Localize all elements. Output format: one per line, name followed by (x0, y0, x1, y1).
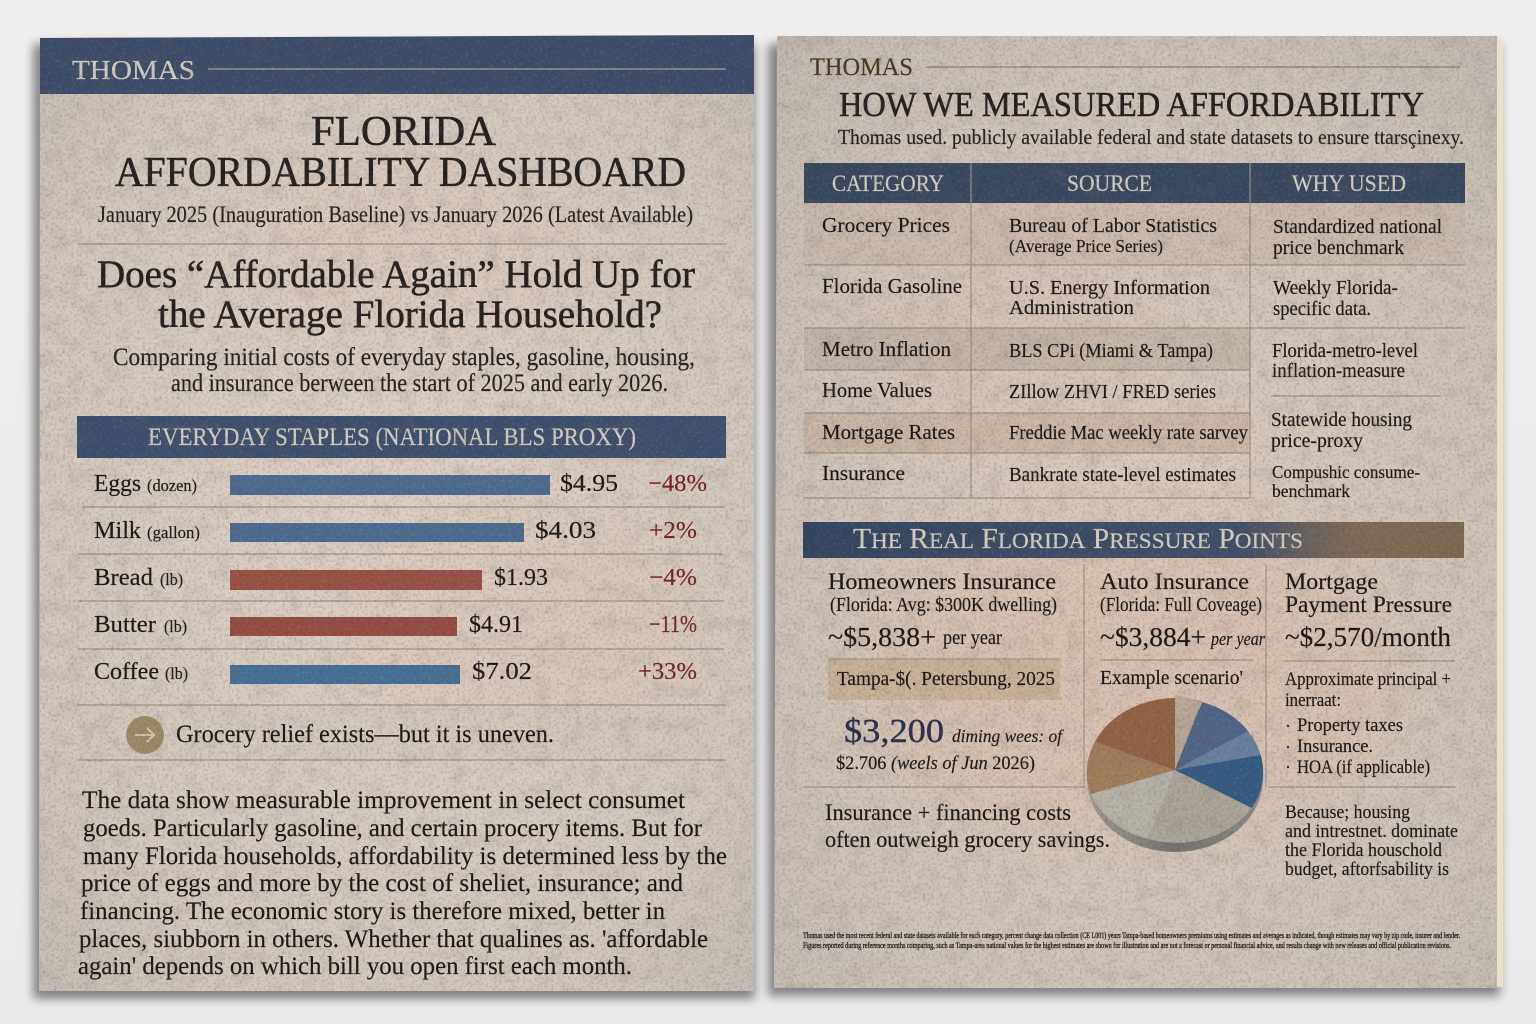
table: sources (804, 163, 1465, 501)
column: auto insurance: ~$3,884+ (1100, 622, 1206, 652)
highlight box: Tampa (828, 660, 1060, 700)
table column: why used: price benchmark (1273, 237, 1404, 259)
callout background (77, 705, 726, 760)
staples panel banner (77, 416, 726, 458)
row: bread (94, 565, 697, 591)
list: mortgage components (1287, 716, 1430, 778)
column: homeowners insurance: (Florida: Avg: $300K dwelling) (830, 595, 1057, 616)
body paragraph: goeds. Particularly gasoline, and certain procery items. But for (83, 813, 702, 842)
takeaway: insurance and financing: Insurance + financing costs (825, 800, 1071, 825)
column: mortgage payment pressure: inerraat: (1285, 691, 1341, 711)
row: bread: Bread (94, 565, 153, 591)
takeaway: insurance and financing (825, 800, 1110, 852)
table column: why used: Statewide housing (1271, 409, 1412, 431)
icon: arrow in circle (126, 716, 164, 754)
row: milk: +2% (649, 518, 697, 544)
row: milk: Milk (94, 518, 141, 544)
column: homeowners insurance: ~$5,838+ (828, 622, 936, 652)
table column: category: Home Values (822, 378, 932, 402)
intro text: datasets: Thomas used. publicly available federal and state datasets to ensure ttarsçinexy. (838, 125, 1464, 149)
highlight box: Tampa: Tampa-$(. Petersbung, 2025 (837, 668, 1055, 690)
table column: why used (1271, 216, 1442, 501)
table column: category: Metro Inflation (822, 337, 951, 361)
row: eggs (94, 471, 707, 497)
title: FLORIDA (311, 109, 497, 155)
body paragraph: financing. The economic story is therefore mixed, better in (80, 896, 665, 925)
row: coffee: $7.02 (472, 659, 532, 685)
list: mortgage components: Property taxes (1297, 716, 1403, 736)
row: butter: −11% (649, 612, 697, 638)
row: coffee (94, 659, 697, 685)
table column: why used: price-proxy (1271, 430, 1363, 452)
column: auto insurance: per year (1209, 629, 1266, 650)
intro text (113, 344, 695, 397)
row: butter (94, 612, 697, 638)
column: mortgage payment pressure: ~$2,570/month (1285, 622, 1451, 652)
staples panel banner: EVERYDAY STAPLES (NATIONAL BLS PROXY) (148, 424, 636, 451)
subtitle: date range: January 2025 (Inauguration Baseline) vs January 2026 (Latest Available) (98, 202, 693, 227)
pressure points banner (803, 522, 1464, 558)
intro text: Comparing initial costs of everyday staples, gasoline, housing, (113, 344, 695, 371)
heading: question: Does “Affordable Again” Hold Up for (97, 253, 695, 296)
column: auto insurance: (Florida: Full Coveage) (1100, 595, 1262, 616)
body paragraph: The data show measurable improvement in select consumet (82, 785, 685, 814)
body paragraph: many Florida households, affordability is determined less by the (83, 841, 727, 870)
pressure points banner: THE REAL FLORIDA PRESSURE POINTS (853, 524, 1303, 555)
table column: source: ZIllow ZHVI / FRED series (1009, 381, 1216, 403)
body paragraph: places, siubborn in others. Whether that qualines as. 'affordable (79, 924, 708, 953)
note: housing dominates: budget, aftorfsability is (1285, 860, 1449, 880)
row: butter: $4.91 (469, 612, 523, 638)
column: mortgage payment pressure: Payment Pressure (1285, 592, 1452, 618)
panel: everyday staples (77, 416, 726, 760)
title (115, 109, 686, 196)
body paragraph: price of eggs and more by the cost of sheliet, insurance; and (81, 868, 683, 897)
column: mortgage payment pressure (1285, 569, 1452, 778)
table column: source (1009, 215, 1249, 486)
table column: category: Grocery Prices (822, 213, 950, 237)
row: milk (94, 518, 697, 544)
page edge: cream paper stack (1495, 40, 1503, 987)
row: coffee: +33% (638, 659, 697, 685)
table column: why used: Compushic consume- (1272, 462, 1420, 482)
row: milk: (gallon) (147, 523, 200, 542)
column: homeowners insurance (828, 569, 1065, 774)
row: bread: $1.93 (494, 565, 548, 591)
note: housing dominates (1285, 803, 1458, 880)
row: eggs: Eggs (94, 471, 141, 497)
heading: question (97, 253, 695, 336)
list: mortgage components: HOA (if applicable) (1297, 758, 1430, 778)
row: coffee: Coffee (94, 659, 159, 685)
table column: category: Florida Gasoline (822, 274, 962, 298)
chart: pie (1087, 695, 1263, 852)
column: homeowners insurance: diming wees: of (952, 726, 1065, 746)
table header: WHY USED (1292, 171, 1406, 196)
panel: left page (39, 35, 754, 991)
row: bread: (lb) (160, 570, 183, 589)
column: mortgage payment pressure: Approximate principal + (1285, 670, 1451, 690)
panel: right page (774, 36, 1497, 988)
body paragraph: again' depends on which bill you open first each month. (78, 951, 632, 980)
table column: why used: Standardized national (1273, 216, 1442, 238)
body paragraph (78, 785, 727, 980)
heading: how we measured: HOW WE MEASURED AFFORDABILITY (839, 85, 1424, 124)
takeaway: insurance and financing: often outweigh grocery savings. (825, 827, 1110, 852)
table column: source: Bankrate state-level estimates (1009, 464, 1236, 486)
table column: source: BLS CPi (Miami & Tampa) (1009, 340, 1213, 362)
table header (804, 163, 1465, 203)
table header: CATEGORY (832, 171, 944, 196)
column: homeowners insurance: $2.706 (weels of Jun 2026) (836, 753, 1035, 774)
masthead: Thomas: THOMAS (810, 54, 913, 81)
column: homeowners insurance: Homeowners Insurance (828, 569, 1056, 595)
table column: category (822, 213, 962, 485)
table column: source: (Average Price Series) (1009, 236, 1163, 257)
row: bread: −4% (649, 565, 697, 591)
footer fine print (790, 921, 1485, 950)
table column: why used: inflation-measure (1272, 360, 1405, 382)
callout: grocery relief: Grocery relief exists—but it is uneven. (176, 721, 554, 748)
column: mortgage payment pressure: Mortgage (1285, 569, 1378, 595)
table column: source: U.S. Energy Information (1009, 277, 1210, 299)
row: butter: (lb) (164, 617, 187, 636)
row: coffee: (lb) (165, 664, 188, 683)
row: milk: $4.03 (535, 518, 596, 544)
column: auto insurance: Auto Insurance (1100, 569, 1249, 595)
row: eggs: $4.95 (560, 471, 618, 497)
column: auto insurance: Example scenario' (1100, 667, 1243, 689)
column: homeowners insurance: per year (943, 628, 1002, 649)
table header: SOURCE (1067, 171, 1152, 196)
row: butter: Butter (94, 612, 156, 638)
note: housing dominates: and intrestnet. dominate (1285, 822, 1458, 842)
row: eggs: −48% (648, 471, 707, 497)
intro text: and insurance berween the start of 2025 and early 2026. (171, 370, 668, 397)
title: AFFORDABILITY DASHBOARD (115, 150, 686, 196)
column: auto insurance (1100, 569, 1266, 689)
header band: Thomas (40, 35, 754, 94)
table column: source: Bureau of Labor Statistics (1009, 215, 1217, 237)
table column: source: Administration (1009, 297, 1134, 319)
table rows shading (804, 203, 1465, 453)
table column: category: Mortgage Rates (822, 420, 955, 444)
table column: why used: Florida-metro-level (1272, 340, 1418, 362)
table column: why used: benchmark (1272, 481, 1350, 501)
table column: why used: Weekly Florida- (1273, 277, 1398, 299)
list: mortgage components: Insurance. (1297, 737, 1373, 757)
panel: pressure points (803, 522, 1464, 880)
table column: category: Insurance (822, 461, 905, 485)
column: homeowners insurance: $3,200 (844, 713, 944, 750)
note: housing dominates: the Florida houschold (1285, 841, 1443, 861)
table column: why used: specific data. (1273, 298, 1371, 320)
note: housing dominates: Because; housing (1285, 803, 1410, 823)
heading: question: the Average Florida Household? (158, 293, 662, 336)
row: eggs: (dozen) (147, 476, 197, 495)
table column: source: Freddie Mac weekly rate sarvey (1009, 422, 1249, 444)
header band: Thomas: THOMAS (72, 55, 195, 85)
